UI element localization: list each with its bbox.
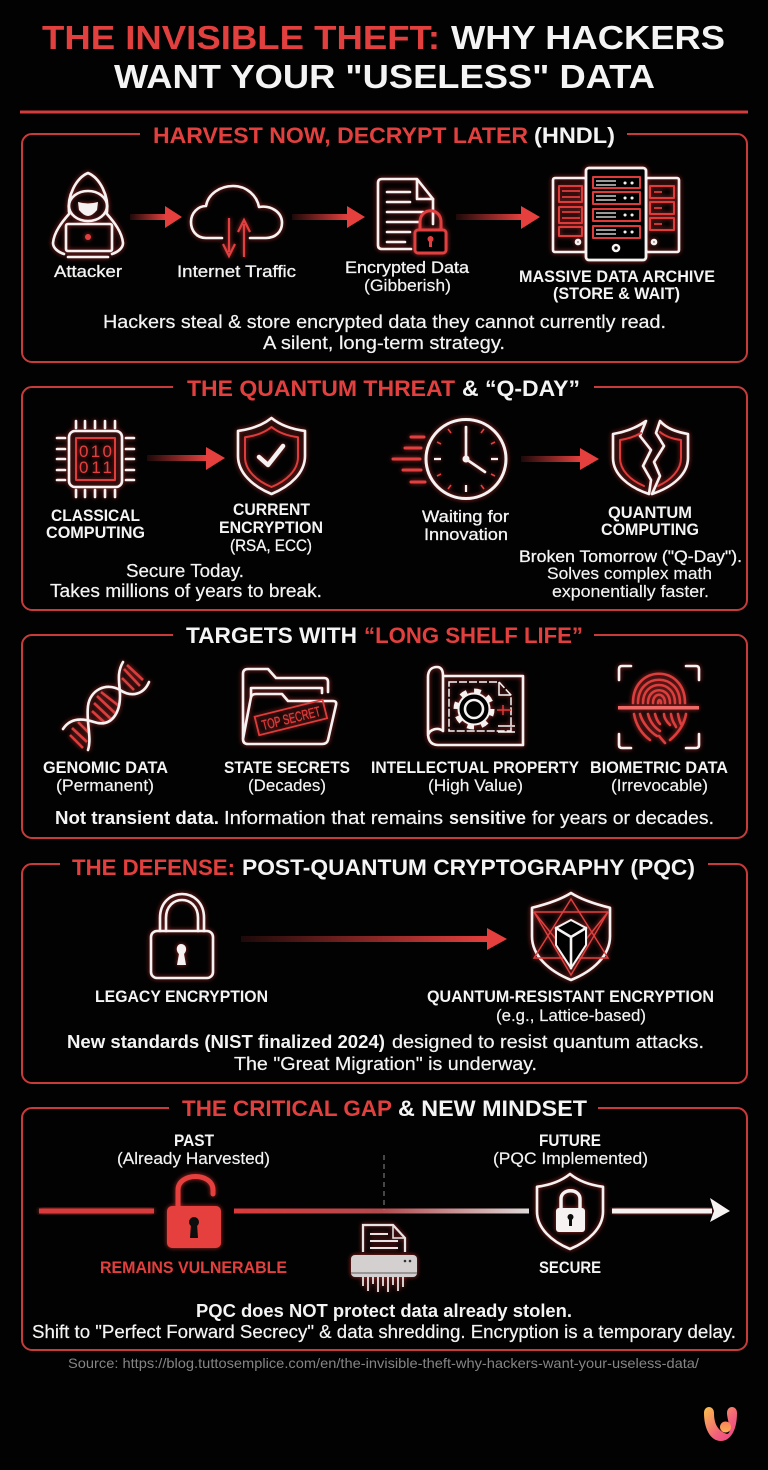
text: broken tomorrow: exponentially faster. [552,583,709,601]
panel: targets [22,623,747,838]
labels: HNDL flow [54,259,715,303]
source line: Source: https://blog.tuttosemplice.com/en/the-invisible-theft-why-hackers-want-your-useless-data/ [68,1355,699,1371]
heading: targets [186,623,583,648]
title [42,19,725,95]
text: HNDL description: Hackers steal & store encrypted data they cannot currently read. [103,312,666,332]
heading: quantum threat [187,376,580,401]
icon: computer chip: 010 [79,442,112,461]
title: WHY HACKERS [451,19,725,56]
text: broken tomorrow: Broken Tomorrow ("Q-Day"). [519,548,742,566]
labels: quantum flow: QUANTUM [608,504,692,522]
panel: quantum threat [22,376,747,610]
text: defense description [67,1032,704,1074]
arrow: encrypted data to archive [456,206,540,229]
icon: secure shield [537,1174,603,1249]
labels: quantum flow [46,501,699,555]
arrow: classical to encryption [147,447,225,470]
heading: targets: “LONG SHELF LIFE” [364,623,583,648]
arrow: waiting to quantum [521,448,599,470]
text: critical gap description: PQC does NOT protect data already stolen. [196,1301,572,1321]
text: targets description: Information that remains [224,808,443,828]
labels: past and future: (PQC Implemented) [493,1150,648,1168]
labels: quantum flow: CURRENT [233,501,310,519]
labels: past and future [117,1132,648,1168]
icon: lattice shield [532,893,610,980]
icon: encrypted document [378,179,446,253]
arrow: traffic to encrypted data [292,206,365,228]
labels: defense: LEGACY ENCRYPTION [95,988,268,1006]
icon: hooded attacker [53,173,123,257]
labels: quantum flow: CLASSICAL [51,507,140,525]
icon: fingerprint scan [618,666,699,748]
text: defense description: The "Great Migration" is underway. [234,1054,537,1074]
labels: outcomes: REMAINS VULNERABLE [100,1259,287,1277]
heading: critical gap [182,1096,587,1121]
icon: DNA helix [63,662,149,750]
labels: quantum flow: (RSA, ECC) [230,537,312,555]
labels: past and future: FUTURE [539,1132,601,1150]
labels: targets: (High Value) [428,777,523,795]
icon: computer chip [57,421,134,497]
heading: defense: POST-QUANTUM CRYPTOGRAPHY (PQC) [242,855,695,880]
labels: past and future: PAST [174,1132,214,1150]
timeline arrow [39,1155,730,1222]
text: HNDL description [103,312,666,353]
text: HNDL description: A silent, long-term strategy. [263,333,505,353]
labels: HNDL flow: Internet Traffic [177,263,296,281]
labels: quantum flow: ENCRYPTION [219,519,323,537]
icon: top secret folder: TOP SECRET [260,703,322,733]
labels: targets: GENOMIC DATA [43,759,168,777]
title: THE INVISIBLE THEFT: [42,19,440,56]
labels: outcomes: SECURE [539,1259,601,1277]
labels: targets: STATE SECRETS [224,759,350,777]
labels: targets: (Irrevocable) [611,777,708,795]
arrow: attacker to traffic [130,206,182,228]
heading: HNDL: HARVEST NOW, DECRYPT LATER [153,123,528,148]
text: critical gap description: Shift to "Perfect Forward Secrecy" & data shredding. Encryption is a temporary delay. [32,1322,736,1342]
labels: defense: QUANTUM-RESISTANT ENCRYPTION [427,988,714,1006]
icon: cloud with traffic [191,186,282,257]
labels: outcomes [100,1259,601,1277]
text: targets description: Not transient data. [55,808,219,828]
labels: HNDL flow: Encrypted Data [345,259,470,277]
labels: targets: INTELLECTUAL PROPERTY [371,759,579,777]
icon: broken shield [613,421,688,494]
labels: HNDL flow: (Gibberish) [364,277,451,295]
heading: targets: TARGETS WITH [186,623,357,648]
labels: quantum flow: Innovation [424,526,508,544]
panel: harvest now, decrypt later [22,123,747,362]
labels: targets: (Decades) [248,777,326,795]
labels: quantum flow: Waiting for [422,508,510,526]
text: broken tomorrow: Solves complex math [547,565,712,583]
icon: open red padlock [167,1176,221,1248]
labels: defense: (e.g., Lattice-based) [496,1007,646,1025]
text: secure today: Secure Today. [126,561,244,581]
heading: quantum threat: THE QUANTUM THREAT [187,376,455,401]
labels: quantum flow: COMPUTING [601,521,699,539]
labels: targets: (Permanent) [56,777,154,795]
icon: document shredder [351,1225,417,1292]
labels: targets: BIOMETRIC DATA [590,759,728,777]
text: targets description [55,808,714,828]
icon: shield with check [238,418,305,494]
panel: critical gap [22,1096,747,1350]
text: targets description: sensitive [449,808,526,828]
text: defense description: New standards (NIST finalized 2024) [67,1032,385,1052]
labels: targets [43,759,728,795]
icon: brand logo [704,1407,737,1441]
title: WANT YOUR "USELESS" DATA [114,58,655,95]
labels: HNDL flow: MASSIVE DATA ARCHIVE [519,268,715,286]
panel: the defense [22,855,747,1083]
text: defense description: designed to resist quantum attacks. [392,1032,704,1052]
arrow: legacy to quantum-resistant [241,928,507,950]
labels: defense [95,988,714,1025]
heading: defense: THE DEFENSE: [72,855,235,880]
text: secure today: Takes millions of years to break. [50,581,322,601]
labels: HNDL flow: (STORE & WAIT) [553,285,680,303]
text: broken tomorrow [519,548,742,601]
heading: critical gap: & NEW MINDSET [398,1096,587,1121]
icon: blueprint with gear [428,667,523,745]
text: secure today [50,561,322,601]
icon: top secret folder [243,669,336,744]
text: targets description: for years or decades. [532,808,714,828]
labels: quantum flow: COMPUTING [46,524,145,542]
icon: computer chip: 011 [79,458,112,477]
heading: quantum threat: & “Q-DAY” [462,376,580,401]
icon: legacy padlock [151,894,213,978]
heading: HNDL: (HNDL) [534,123,615,148]
text: critical gap description [32,1301,736,1342]
icon: clock with speed lines [393,420,506,498]
labels: HNDL flow: Attacker [54,263,123,281]
labels: past and future: (Already Harvested) [117,1150,270,1168]
heading: critical gap: THE CRITICAL GAP [182,1096,392,1121]
icon: server racks [553,168,679,260]
